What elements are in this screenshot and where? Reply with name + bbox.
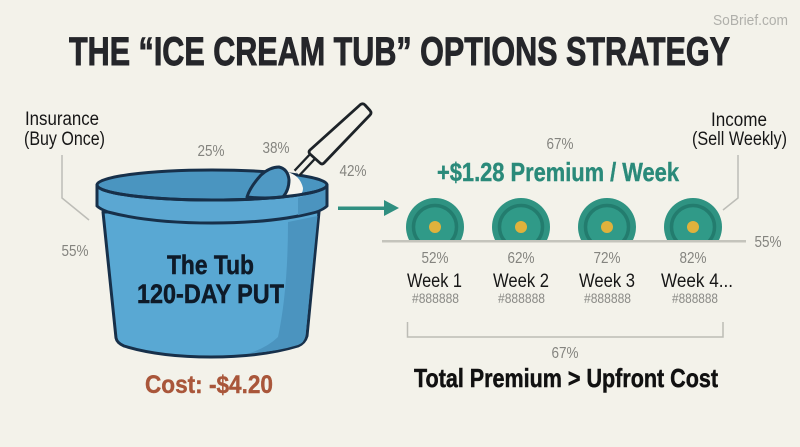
tub label	[137, 250, 284, 309]
percent labels around tub: 42%	[340, 163, 366, 180]
label: income	[692, 110, 787, 150]
rim shade	[298, 188, 326, 215]
label: insurance: Insurance	[25, 109, 99, 130]
label: insurance	[24, 109, 105, 150]
week 3 labels: 72%	[594, 250, 620, 267]
icon: ice cream tub	[97, 104, 371, 357]
baseline	[382, 240, 746, 242]
tub label: The Tub	[167, 250, 254, 280]
week 1 labels: Week 1	[407, 271, 462, 292]
tub rim band	[97, 185, 327, 223]
percent labels around tub	[62, 140, 366, 260]
week 3 labels	[579, 250, 635, 306]
arrow	[338, 200, 399, 216]
premium heading: +$1.28 Premium / Week	[437, 157, 679, 187]
week 2 labels: #888888	[498, 290, 545, 306]
scoop bowl	[285, 172, 303, 197]
cost label: Cost: -$4.20	[145, 371, 273, 399]
week 1 labels	[407, 250, 462, 306]
tub opening	[97, 170, 327, 200]
coins	[406, 198, 722, 240]
label: income: Income	[711, 110, 767, 131]
week 2 labels: Week 2	[493, 271, 549, 292]
tub label: 120-DAY PUT	[137, 279, 284, 309]
tub body	[103, 212, 319, 357]
week 4 labels: 82%	[680, 250, 706, 267]
watermark: SoBrief.com	[713, 12, 788, 29]
week 4 labels	[661, 250, 733, 306]
week 3 labels: Week 3	[579, 271, 635, 292]
percent label: premium: 67%	[546, 136, 574, 153]
tub body shade	[250, 216, 318, 353]
week 2 labels: 62%	[508, 250, 534, 267]
percent labels around tub: 55%	[62, 243, 88, 260]
coin 3	[578, 198, 636, 240]
leader line: insurance	[62, 155, 89, 220]
week 1 labels: #888888	[412, 290, 459, 306]
coin 4	[664, 198, 722, 240]
conclusion: Total Premium > Upfront Cost	[414, 363, 718, 393]
label: insurance: (Buy Once)	[24, 129, 105, 150]
percent labels around tub: 25%	[198, 143, 224, 160]
week 4 labels: Week 4...	[661, 271, 733, 292]
rim front edge	[97, 185, 327, 200]
percent labels around tub: 38%	[262, 140, 290, 157]
week 3 labels: #888888	[584, 290, 631, 306]
scoop handle	[297, 104, 371, 173]
week 4 labels: #888888	[672, 290, 718, 306]
week 2 labels	[493, 250, 549, 306]
bracket	[408, 322, 723, 337]
percent label: baseline: 55%	[754, 234, 782, 251]
percent label: bracket: 67%	[552, 345, 578, 362]
coin 2	[492, 198, 550, 240]
week 1 labels: 52%	[422, 250, 448, 267]
coin 1	[406, 198, 464, 240]
leader line: income	[723, 155, 738, 210]
